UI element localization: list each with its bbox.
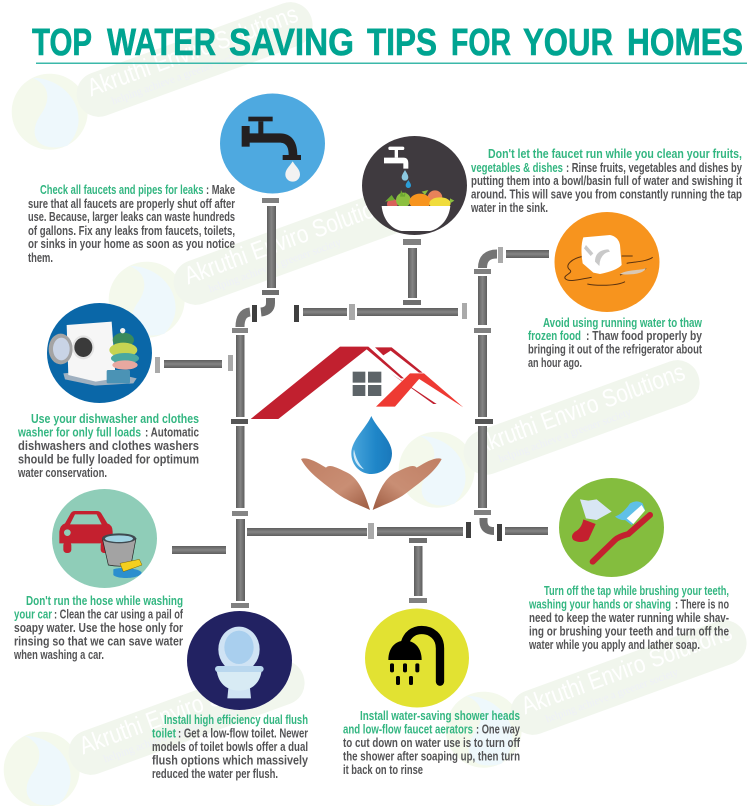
icon: toilet bbox=[187, 611, 292, 710]
tip: thawing food bbox=[528, 315, 703, 370]
tip: full loads: Use your dishwasher and clothes bbox=[31, 411, 199, 426]
tip: shower heads: and low-flow faucet aerators bbox=[343, 722, 473, 736]
tip: fruits and dishes: water in the sink. bbox=[470, 200, 548, 215]
tip: dual flush toilet: Install high efficiency dual flush bbox=[164, 712, 308, 727]
tip: check faucets bbox=[28, 182, 235, 265]
house window bbox=[353, 372, 381, 396]
watermark: upper middle: helping achieve a greener society bbox=[207, 236, 343, 295]
tip: shower heads: it back on to rinse bbox=[343, 762, 423, 777]
tip: brushing teeth: washing your hands or shaving bbox=[528, 596, 671, 612]
tip: thawing food: Avoid using running water to thaw bbox=[543, 315, 703, 330]
tip: dual flush toilet: toilet bbox=[152, 726, 177, 740]
watermark: bottom left bbox=[0, 639, 316, 806]
watermark: bottom left: helping achieve a greener society bbox=[102, 706, 238, 765]
tip: check faucets: of gallons. Fix any leaks from faucets, toilets, bbox=[28, 223, 235, 238]
pipe: shower connector bbox=[409, 538, 427, 603]
watermark: bottom right bbox=[435, 599, 750, 778]
tip: check faucets: Check all faucets and pipes for leaks bbox=[40, 182, 204, 197]
roof: main red slope bbox=[251, 347, 404, 419]
tip: washing car bbox=[13, 593, 183, 662]
watermark: bottom right: helping achieve a greener society bbox=[544, 666, 680, 725]
icon: car with bucket and sponge bbox=[52, 489, 157, 588]
tip: dual flush toilet bbox=[152, 712, 309, 781]
tip: washing car: when washing a car. bbox=[13, 647, 104, 662]
icon: faucet over fruit bowl bbox=[362, 136, 467, 235]
tip: check faucets: sure that all faucets are properly shut off after bbox=[28, 196, 235, 211]
tip: shower heads: Install water-saving shower heads bbox=[360, 708, 520, 723]
tip: dual flush toilet: : Get a low-flow toilet. Newer bbox=[178, 726, 308, 740]
icon: dripping tap bbox=[220, 94, 325, 194]
watermark: centre right bbox=[388, 339, 711, 518]
tip: washing car: your car bbox=[14, 606, 52, 622]
pipe: left column bbox=[231, 328, 249, 608]
tip: shower heads: the shower after soaping up, then turn bbox=[343, 748, 520, 764]
tip: check faucets: them. bbox=[28, 250, 53, 265]
title bbox=[32, 22, 743, 64]
watermark: bottom left: Akruthi Enviro Solutions bbox=[76, 658, 294, 760]
tip: dual flush toilet: flush options which massively bbox=[152, 752, 309, 768]
tip: full loads bbox=[17, 411, 199, 480]
tip: check faucets: or sinks in your home as soon as you notice bbox=[28, 236, 235, 251]
watermark: top left bbox=[1, 0, 324, 160]
icon: washing machine and laundry bbox=[47, 303, 152, 403]
watermark: centre right: helping achieve a greener society bbox=[497, 406, 633, 465]
title: YOUR bbox=[523, 22, 613, 64]
water drop bbox=[351, 416, 392, 474]
pipe: top row bbox=[294, 303, 467, 322]
watermark: upper middle bbox=[98, 164, 434, 348]
central house, water drop and hands bbox=[251, 347, 463, 510]
tip: fruits and dishes bbox=[470, 146, 743, 215]
watermark: upper middle: Akruthi Enviro Solutions bbox=[181, 188, 399, 290]
pipe: faucet bowl connector bbox=[403, 239, 421, 305]
tip: full loads: washer for only full loads bbox=[17, 424, 141, 440]
pipe: washer connector bbox=[155, 355, 233, 373]
tip: washing car: : Clean the car using a pail of bbox=[54, 606, 183, 622]
pipe: right column bbox=[474, 247, 549, 541]
tip: dual flush toilet: reduced the water per flush. bbox=[152, 766, 278, 781]
title: TIPS bbox=[367, 22, 437, 64]
tip: brushing teeth: : There is no bbox=[675, 596, 729, 612]
tip: shower heads bbox=[343, 708, 521, 777]
icon: shaving brush and toothbrush bbox=[559, 478, 664, 577]
cupped hands bbox=[301, 458, 442, 510]
tip: shower heads: : One way bbox=[476, 722, 521, 736]
title: FOR bbox=[451, 22, 511, 64]
tip: check faucets: use. Because, larger leaks can waste hundreds bbox=[28, 209, 235, 224]
pipe network bbox=[155, 198, 549, 608]
title: SAVING bbox=[229, 22, 354, 64]
tip: thawing food: an hour ago. bbox=[528, 355, 582, 370]
tip: thawing food: : Thaw food properly by bbox=[586, 328, 703, 343]
tip: shower heads: to cut down on water use is to turn off bbox=[343, 735, 521, 750]
tip: dual flush toilet: models of toilet bowls offer a dual bbox=[152, 739, 308, 754]
pipe: car connector bbox=[172, 546, 226, 554]
pipe: bottom row bbox=[247, 522, 471, 539]
tip: full loads: water conservation. bbox=[17, 465, 107, 480]
roof: thin lines and right gable bbox=[375, 347, 463, 407]
pipe: tap to left column bbox=[240, 198, 279, 327]
watermark: centre right: Akruthi Enviro Solutions bbox=[471, 358, 689, 460]
title: WATER bbox=[107, 22, 216, 64]
tip: washing car: soapy water. Use the hose only for bbox=[14, 620, 183, 635]
tip: full loads: : Automatic bbox=[145, 424, 199, 440]
icon: melting ice cube bbox=[554, 212, 660, 312]
tip: brushing teeth bbox=[528, 583, 729, 652]
icon: shower head bbox=[365, 608, 469, 708]
tip: check faucets: : Make bbox=[206, 182, 235, 197]
tip: full loads: should be fully loaded for optimum bbox=[18, 452, 199, 466]
tip: washing car: Don't run the hose while washing bbox=[26, 593, 183, 608]
tip: full loads: dishwashers and clothes washers bbox=[18, 438, 199, 453]
tip: washing car: rinsing so that we can save water bbox=[14, 634, 183, 648]
tip: thawing food: frozen food bbox=[528, 328, 581, 343]
watermark: top left: helping achieve a greener society bbox=[110, 48, 246, 107]
title: TOP bbox=[32, 22, 92, 64]
tip: fruits and dishes: vegetables & dishes bbox=[471, 160, 563, 175]
